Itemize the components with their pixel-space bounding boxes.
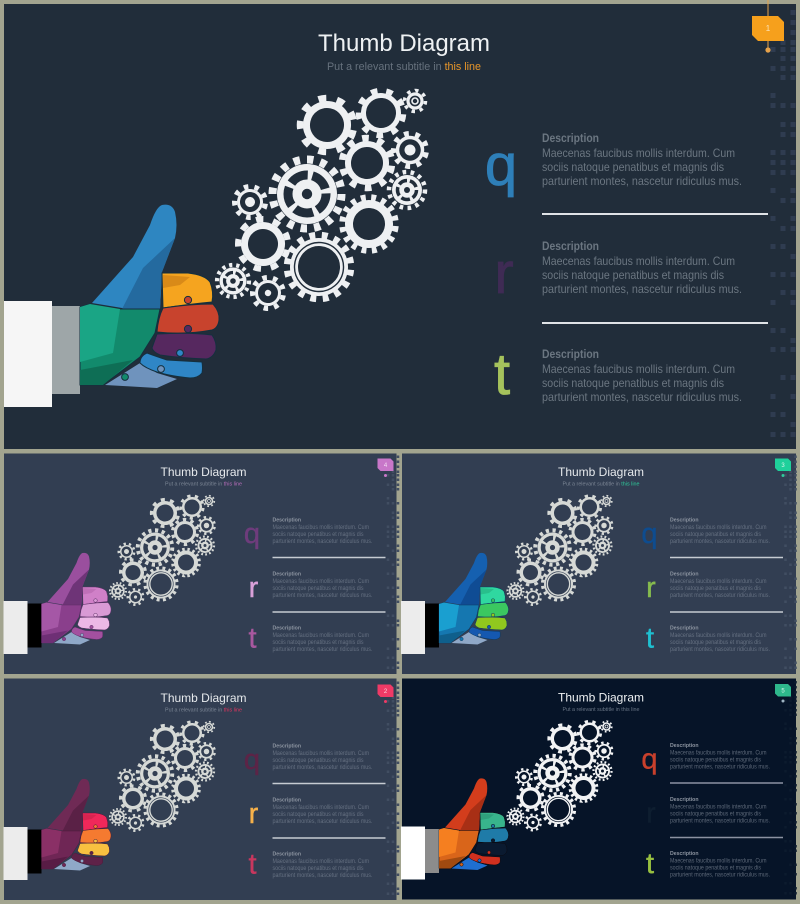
gear cluster bbox=[110, 495, 216, 606]
letter t: t bbox=[494, 342, 510, 407]
page tag bbox=[775, 458, 791, 477]
page tag bbox=[378, 458, 394, 477]
title: Thumb Diagram bbox=[558, 690, 644, 704]
description 1: Description bbox=[272, 518, 301, 524]
letter q: q bbox=[485, 133, 517, 198]
description 3: parturient montes, nascetur ridiculus mus. bbox=[670, 872, 770, 878]
page tag bbox=[775, 684, 791, 702]
description 1: Maecenas faucibus mollis interdum. Cum bbox=[542, 146, 735, 160]
description 3: Maecenas faucibus mollis interdum. Cum bbox=[272, 859, 369, 865]
panel: blue variant slide bbox=[401, 454, 797, 674]
page tag: 4 bbox=[384, 463, 388, 469]
description 1: Description bbox=[542, 133, 599, 145]
description 2: Maecenas faucibus mollis interdum. Cum bbox=[272, 579, 369, 585]
description 2 bbox=[272, 572, 373, 599]
description 2: Description bbox=[670, 797, 699, 803]
description 3: Maecenas faucibus mollis interdum. Cum bbox=[670, 633, 766, 639]
description 3: sociis natoque penatibus et magnis dis bbox=[542, 376, 724, 390]
description 1: Maecenas faucibus mollis interdum. Cum bbox=[670, 750, 766, 756]
description 2: sociis natoque penatibus et magnis dis bbox=[670, 812, 761, 818]
description 1: Description bbox=[272, 744, 301, 750]
description 1: Description bbox=[670, 518, 699, 524]
description 1 bbox=[272, 744, 373, 771]
gear cluster bbox=[508, 720, 614, 831]
description 3: Description bbox=[670, 626, 699, 632]
title: Thumb Diagram bbox=[160, 691, 246, 705]
description 3: parturient montes, nascetur ridiculus mus. bbox=[670, 647, 770, 653]
letter r: r bbox=[249, 572, 259, 604]
description 1: Maecenas faucibus mollis interdum. Cum bbox=[670, 525, 766, 531]
subtitle: Put a relevant subtitle in this line bbox=[562, 707, 640, 713]
description 3: Maecenas faucibus mollis interdum. Cum bbox=[670, 858, 766, 864]
description 1: parturient montes, nascetur ridiculus mus. bbox=[542, 174, 742, 188]
letter t: t bbox=[248, 622, 257, 654]
description 1: sociis natoque penatibus et magnis dis bbox=[542, 160, 724, 174]
description 3: parturient montes, nascetur ridiculus mus. bbox=[542, 390, 742, 404]
description 1: Maecenas faucibus mollis interdum. Cum bbox=[272, 751, 369, 757]
description 3 bbox=[670, 851, 770, 878]
description 2: sociis natoque penatibus et magnis dis bbox=[272, 586, 364, 592]
letter q: q bbox=[244, 518, 260, 550]
description 2 bbox=[670, 797, 770, 824]
description 1: parturient montes, nascetur ridiculus mus. bbox=[670, 764, 770, 770]
description 2: sociis natoque penatibus et magnis dis bbox=[542, 268, 724, 282]
panel: dark orange variant slide bbox=[401, 678, 797, 900]
description 3: parturient montes, nascetur ridiculus mus. bbox=[272, 873, 373, 879]
description 1 bbox=[542, 133, 742, 188]
page tag: 1 bbox=[766, 24, 771, 33]
description 1 bbox=[670, 743, 770, 770]
subtitle: Put a relevant subtitle in this line bbox=[327, 61, 481, 73]
description 1: sociis natoque penatibus et magnis dis bbox=[272, 532, 364, 538]
description 3: Maecenas faucibus mollis interdum. Cum bbox=[542, 362, 735, 376]
gear cluster bbox=[217, 89, 429, 311]
subtitle: Put a relevant subtitle in this line bbox=[165, 482, 242, 488]
description 3: sociis natoque penatibus et magnis dis bbox=[670, 640, 761, 646]
description 2: parturient montes, nascetur ridiculus mus. bbox=[272, 593, 373, 599]
panel: main slide bbox=[4, 0, 796, 449]
letter q: q bbox=[641, 518, 658, 550]
description 3 bbox=[272, 626, 373, 653]
description 1: sociis natoque penatibus et magnis dis bbox=[272, 758, 364, 764]
panel: purple variant slide bbox=[4, 454, 399, 674]
letter r: r bbox=[646, 572, 656, 604]
description 2: sociis natoque penatibus et magnis dis bbox=[670, 586, 761, 592]
description 1: parturient montes, nascetur ridiculus mus. bbox=[272, 765, 373, 771]
description 3: parturient montes, nascetur ridiculus mus. bbox=[272, 647, 373, 653]
subtitle: Put a relevant subtitle in this line bbox=[165, 708, 242, 714]
description 1: Maecenas faucibus mollis interdum. Cum bbox=[272, 525, 369, 531]
icon: thumbs up hand bbox=[4, 205, 219, 407]
letter t: t bbox=[646, 848, 654, 880]
gear cluster bbox=[110, 721, 216, 832]
page tag: 2 bbox=[384, 689, 388, 695]
icon: thumbs up hand bbox=[4, 779, 111, 880]
description 2: parturient montes, nascetur ridiculus mus. bbox=[272, 819, 373, 825]
subtitle: Put a relevant subtitle in this line bbox=[562, 482, 640, 488]
title: Thumb Diagram bbox=[160, 465, 246, 479]
description 1: parturient montes, nascetur ridiculus mus. bbox=[272, 539, 373, 545]
title: Thumb Diagram bbox=[318, 30, 490, 57]
description 1: sociis natoque penatibus et magnis dis bbox=[670, 532, 761, 538]
description 3: sociis natoque penatibus et magnis dis bbox=[272, 640, 364, 646]
description 2: Description bbox=[670, 572, 699, 578]
description 3 bbox=[272, 852, 373, 879]
description 2: parturient montes, nascetur ridiculus mus. bbox=[670, 593, 770, 599]
description 3: Maecenas faucibus mollis interdum. Cum bbox=[272, 633, 369, 639]
panel: crimson variant slide bbox=[4, 678, 399, 900]
description 3: Description bbox=[272, 852, 301, 858]
description 2: Maecenas faucibus mollis interdum. Cum bbox=[542, 254, 735, 268]
description 3: Description bbox=[670, 851, 699, 857]
page tag bbox=[378, 684, 394, 703]
letter r: r bbox=[494, 241, 514, 306]
icon: thumbs up hand bbox=[401, 778, 509, 880]
description 2 bbox=[670, 572, 770, 599]
description 3: Description bbox=[272, 626, 301, 632]
description 1 bbox=[272, 518, 373, 545]
letter q: q bbox=[244, 744, 260, 776]
description 2 bbox=[272, 798, 373, 825]
description 3: sociis natoque penatibus et magnis dis bbox=[272, 866, 364, 872]
description 1: sociis natoque penatibus et magnis dis bbox=[670, 758, 761, 764]
description 1 bbox=[670, 518, 770, 545]
title: Thumb Diagram bbox=[558, 465, 644, 479]
description 2 bbox=[542, 241, 742, 296]
description 3 bbox=[542, 349, 742, 404]
description 3: sociis natoque penatibus et magnis dis bbox=[670, 866, 761, 872]
description 2: Maecenas faucibus mollis interdum. Cum bbox=[670, 579, 766, 585]
icon: thumbs up hand bbox=[4, 553, 111, 654]
description 2: Description bbox=[272, 798, 301, 804]
icon: thumbs up hand bbox=[401, 553, 509, 654]
description 1: Description bbox=[670, 743, 699, 749]
letter t: t bbox=[248, 848, 257, 880]
description 2: sociis natoque penatibus et magnis dis bbox=[272, 812, 364, 818]
letter r: r bbox=[646, 798, 656, 830]
description 3: Description bbox=[542, 349, 599, 361]
description 2: Description bbox=[272, 572, 301, 578]
page tag bbox=[752, 0, 784, 53]
letter q: q bbox=[641, 744, 658, 776]
page tag: 3 bbox=[781, 463, 785, 469]
description 1: parturient montes, nascetur ridiculus mus. bbox=[670, 539, 770, 545]
letter t: t bbox=[646, 622, 654, 654]
gear cluster bbox=[508, 495, 614, 606]
letter r: r bbox=[249, 798, 259, 830]
page tag: 5 bbox=[781, 688, 785, 694]
description 2: parturient montes, nascetur ridiculus mus. bbox=[670, 818, 770, 824]
description 2: Maecenas faucibus mollis interdum. Cum bbox=[670, 804, 766, 810]
description 2: Maecenas faucibus mollis interdum. Cum bbox=[272, 805, 369, 811]
description 3 bbox=[670, 626, 770, 653]
description 2: parturient montes, nascetur ridiculus mus. bbox=[542, 282, 742, 296]
description 2: Description bbox=[542, 241, 599, 253]
